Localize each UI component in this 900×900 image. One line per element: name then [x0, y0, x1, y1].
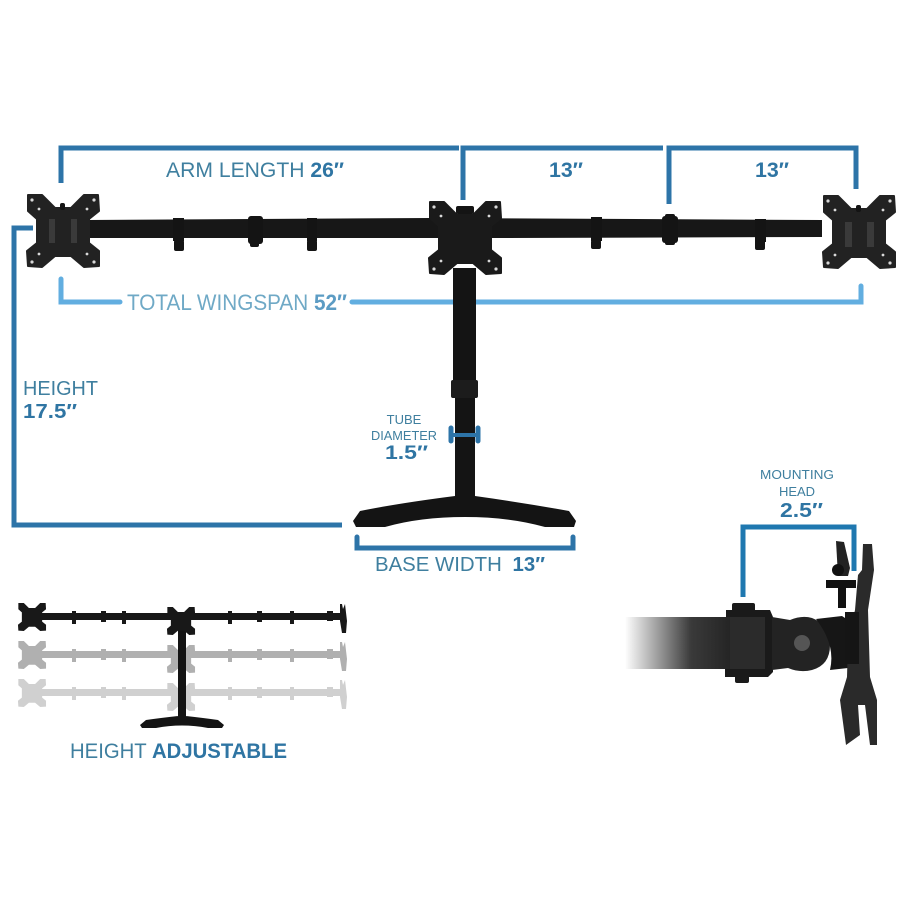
label: mounting head: HEAD — [779, 484, 815, 499]
label: mounting head: MOUNTING — [760, 467, 834, 482]
label: tube diameter — [371, 412, 437, 464]
bracket: joint to end 13 inch — [669, 148, 856, 204]
bracket: arm length 26 inch — [61, 148, 459, 183]
swivel link — [772, 617, 830, 671]
label: arm length: ARM LENGTH 26″ — [166, 159, 344, 182]
label: mounting head: 2.5″ — [780, 500, 823, 522]
label: tube diameter: DIAMETER — [371, 428, 437, 443]
bracket: height — [14, 228, 342, 525]
top position — [18, 603, 347, 635]
arm bar — [88, 214, 822, 251]
center mounting plate — [429, 202, 501, 274]
label: height: 17.5″ — [23, 401, 77, 423]
mini pole and base — [140, 625, 224, 728]
left mounting plate — [27, 195, 99, 267]
arm clamp — [725, 603, 773, 683]
swivel bolt — [794, 635, 810, 651]
stand pole — [451, 268, 478, 502]
mounting head detail — [625, 541, 877, 745]
height adjustable illustration — [18, 603, 347, 728]
bracket: base width — [357, 537, 573, 548]
stand base — [353, 496, 576, 527]
label: height: HEIGHT — [23, 378, 98, 400]
neck — [816, 616, 848, 670]
bracket: total wingspan — [61, 279, 861, 302]
label: tube diameter: TUBE — [387, 412, 422, 427]
right mounting plate — [823, 196, 895, 268]
bracket: mounting head — [743, 527, 854, 597]
faded position middle — [18, 641, 347, 673]
bracket: center to joint 13 inch — [463, 148, 663, 200]
vertical plate — [840, 544, 877, 745]
label: tube diameter: 1.5″ — [385, 443, 428, 464]
label: height adjustable: HEIGHT ADJUSTABLE — [70, 740, 287, 763]
label: 13 inch right: 13″ — [755, 159, 789, 182]
top bracket tip — [836, 541, 850, 576]
faded position low — [18, 679, 347, 711]
label: base width: BASE WIDTH 13″ — [375, 554, 545, 576]
label: 13 inch middle: 13″ — [549, 159, 583, 182]
tube diameter marker — [451, 428, 478, 441]
label: total wingspan: TOTAL WINGSPAN 52″ — [127, 290, 347, 315]
label: height — [23, 378, 98, 423]
faded arm — [625, 617, 735, 669]
label: mounting head — [760, 467, 834, 522]
main monitor stand — [27, 195, 895, 527]
